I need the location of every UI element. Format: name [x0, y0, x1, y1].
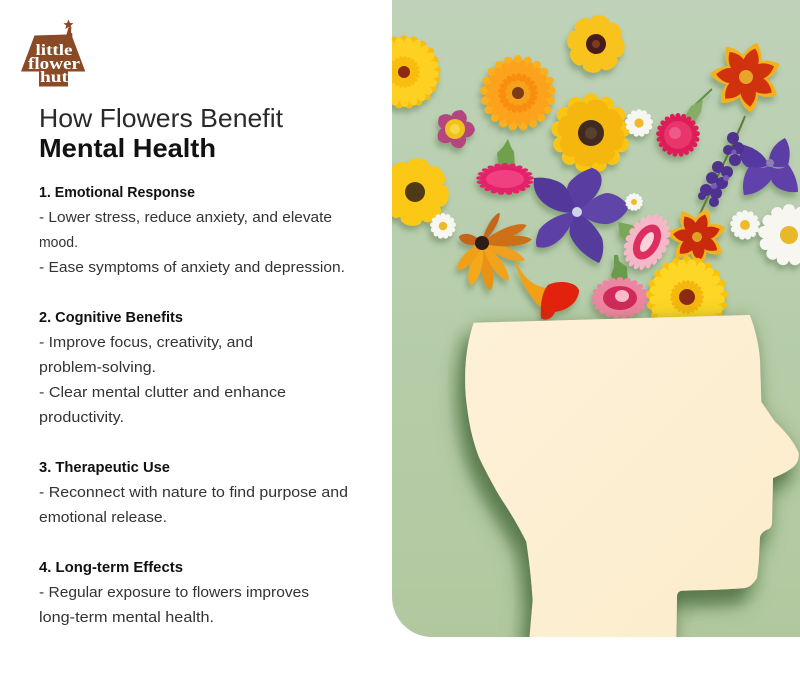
flower: small daisy by sunflower — [625, 109, 653, 137]
section: emotional response: - Lower stress, reduce anxiety, and elevate — [39, 210, 332, 226]
section: cognitive benefits: productivity. — [39, 410, 124, 426]
section: therapeutic use: emotional release. — [39, 510, 167, 526]
section: therapeutic use — [39, 460, 348, 526]
section: cognitive benefits: - Clear mental clutter and enhance — [39, 385, 286, 401]
flower: big purple balloon flower — [534, 168, 629, 263]
flower: pink anemone — [434, 110, 475, 156]
logo: little flower hut: hut — [40, 69, 69, 86]
flower: small daisy right — [730, 210, 760, 240]
section: long-term effects: long-term mental health. — [39, 610, 214, 626]
section: emotional response: 1. Emotional Response — [39, 185, 195, 201]
section: therapeutic use: 3. Therapeutic Use — [39, 460, 170, 476]
section: cognitive benefits: problem-solving. — [39, 360, 156, 376]
head silhouette — [465, 315, 799, 640]
flower: purple stem spike — [698, 116, 745, 214]
flower: red-yellow small — [666, 208, 726, 264]
section: long-term effects: 4. Long-term Effects — [39, 560, 183, 576]
title: How Flowers Benefit — [39, 103, 284, 133]
section: emotional response: - Ease symptoms of anxiety and depression. — [39, 260, 345, 276]
flower: white daisy right — [758, 204, 800, 266]
flower: red and yellow star — [706, 42, 780, 118]
flower: pink and white carnation — [614, 214, 670, 276]
flower: pink carnation with bud — [476, 139, 534, 195]
section: emotional response: mood. — [39, 235, 78, 251]
flower: small daisy left — [430, 213, 456, 239]
flower: nasturtium — [515, 260, 579, 320]
flower: pink carnation with stem — [656, 89, 712, 157]
section: cognitive benefits — [39, 310, 286, 426]
section: long-term effects — [39, 560, 309, 626]
title — [39, 103, 284, 163]
flower: sunflower — [550, 92, 632, 174]
flower: pink carnation bottom — [591, 255, 649, 319]
section: long-term effects: - Regular exposure to flowers improves — [39, 585, 309, 601]
flowers group — [392, 15, 800, 321]
flower: purple balloon flower right — [739, 138, 798, 195]
flower: bottom yellow — [643, 256, 728, 318]
section: cognitive benefits: 2. Cognitive Benefits — [39, 310, 183, 326]
title: Mental Health — [39, 133, 216, 163]
logo: little flower hut: flower — [28, 54, 80, 73]
section: cognitive benefits: - Improve focus, creativity, and — [39, 335, 253, 351]
flower: yellow marigold left — [392, 35, 442, 116]
panel: flowers and head illustration — [364, 0, 800, 640]
section: therapeutic use: - Reconnect with nature to find purpose and — [39, 485, 348, 501]
flower: yellow black-eyed — [392, 158, 449, 233]
logo: little flower hut: little — [36, 42, 72, 59]
section: emotional response — [39, 185, 345, 276]
flower: orange calendula — [480, 55, 556, 131]
logo: little flower hut — [21, 20, 85, 86]
flower: top yellow — [562, 10, 630, 78]
flower: small daisy bud — [625, 193, 643, 211]
flower: orange drooping — [454, 211, 532, 291]
